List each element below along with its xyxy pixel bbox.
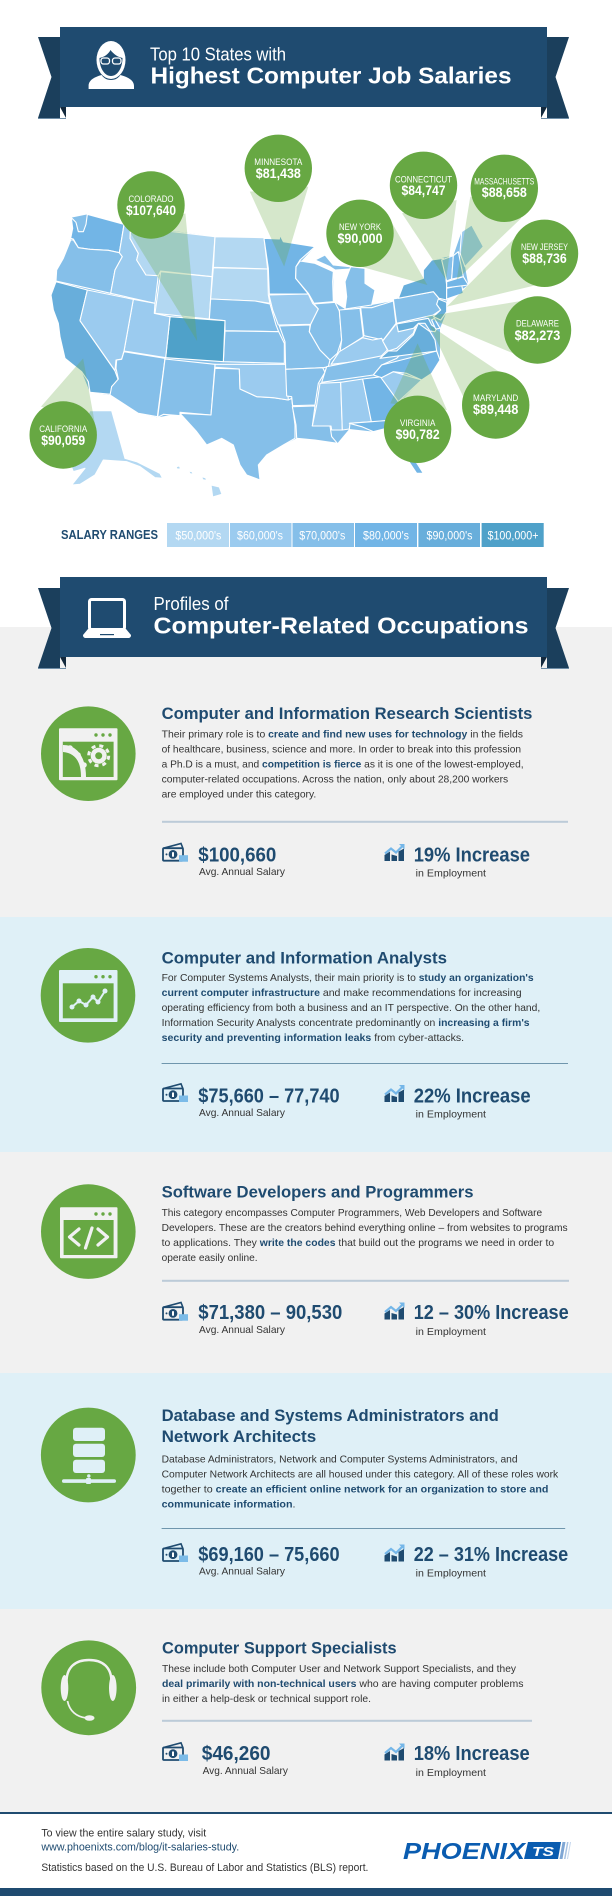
logo: Phoenix TS: [403, 1838, 571, 1864]
text: research scientists description: a Ph.D is a must, and competition is fierce as it is one of the lowest-employed,: [162, 759, 524, 771]
icon: growth chart: [384, 844, 404, 861]
logo: Phoenix TS: PHOENIX: [403, 1838, 527, 1864]
stat: employment: in Employment: [416, 1568, 486, 1580]
stat: salary: [198, 1544, 340, 1578]
map callout wedges: [41, 187, 537, 423]
stat: salary: [198, 845, 286, 878]
icon: server network: [41, 1408, 136, 1502]
stat: employment: in Employment: [416, 868, 486, 880]
heading: software developers: Software Developers and Programmers: [162, 1182, 474, 1201]
stat: salary: Avg. Annual Salary: [199, 866, 286, 878]
text: software developers description: operate easily online.: [162, 1252, 258, 1264]
background: gray panel behind profiles: [0, 627, 612, 1812]
callout: Minnesota: [245, 135, 312, 202]
callout: Virginia: VIRGINIA: [400, 418, 436, 429]
icon: person with glasses: [89, 41, 134, 89]
heading: database administrators: Network Architects: [162, 1427, 316, 1446]
callout: Colorado: [117, 171, 185, 239]
callout: New Jersey: [511, 220, 578, 287]
stat: salary: [198, 1085, 340, 1119]
legend: salary ranges: $50,000's: [175, 528, 221, 542]
text: research scientists description: are employed under this category.: [162, 789, 316, 801]
icon: money: [163, 1084, 188, 1102]
legend: salary ranges: [61, 523, 544, 547]
callout: Minnesota: MINNESOTA: [254, 157, 303, 168]
heading: database administrators: [162, 1406, 499, 1446]
stat: salary: $46,260: [202, 1743, 270, 1765]
callout: Connecticut: [390, 152, 457, 219]
callout: Delaware: $82,273: [515, 327, 561, 343]
callout: Connecticut: CONNECTICUT: [395, 174, 452, 185]
heading: research scientists: Computer and Information Research Scientists: [162, 704, 532, 723]
legend: salary ranges: $90,000's: [426, 528, 472, 542]
stat: employment: 19% Increase: [414, 845, 530, 867]
stat: salary: $100,660: [198, 845, 276, 867]
callout: Delaware: DELAWARE: [516, 319, 559, 330]
callout: Virginia: [384, 396, 451, 463]
icon: money: [163, 1544, 188, 1562]
heading: analysts: Computer and Information Analysts: [162, 948, 447, 967]
heading: top 10 states: Highest Computer Job Salaries: [150, 62, 512, 88]
map: western states: [51, 214, 483, 497]
stat: employment: 22 – 31% Increase: [414, 1544, 568, 1566]
stat: employment: 12 – 30% Increase: [414, 1302, 569, 1324]
text: study link: Statistics based on the U.S. Bureau of Labor and Statistics (BLS) report.: [41, 1862, 368, 1874]
stat: salary: $75,660 – 77,740: [198, 1085, 340, 1107]
text: analysts description: operating efficiency from both a business and an IT perspective. On the other hand,: [162, 1002, 540, 1014]
text: study link: To view the entire salary study, visit: [41, 1828, 206, 1840]
callout: California: CALIFORNIA: [39, 424, 88, 435]
legend: salary ranges: SALARY RANGES: [61, 527, 158, 542]
heading: top 10 states: Top 10 States with: [150, 44, 286, 64]
text: software developers description: to applications. They write the codes that build out the programs we need in order to: [162, 1237, 554, 1249]
heading: database administrators: Database and Systems Administrators and: [162, 1406, 499, 1425]
icon: growth chart: [384, 1744, 404, 1760]
stat: employment: [414, 1544, 568, 1580]
callout: California: [30, 401, 97, 469]
icon: line chart window: [41, 948, 135, 1043]
panel: analysts: [0, 917, 612, 1152]
callout: Massachusetts: MASSACHUSETTS: [474, 176, 534, 187]
text: support specialists description: in either a help-desk or technical support role.: [162, 1693, 371, 1705]
text: research scientists description: [162, 729, 524, 801]
text: analysts description: For Computer Systems Analysts, their main priority is to study an organization's: [162, 972, 534, 984]
callout: Virginia: $90,782: [396, 426, 440, 442]
heading: profiles: Computer-Related Occupations: [154, 612, 528, 638]
callout: Colorado: $107,640: [126, 202, 176, 218]
stat: salary: [198, 1302, 342, 1336]
icon: code window: [41, 1184, 136, 1279]
banner: top 10 states: [38, 27, 569, 119]
panel: support specialists: [41, 1638, 532, 1779]
icon: money: [163, 1743, 188, 1761]
panel: footer: [0, 1812, 612, 1896]
text: software developers description: Developers. These are the creators behind everything online – from websites to programs: [162, 1222, 568, 1234]
stat: employment: 22% Increase: [414, 1085, 531, 1107]
stat: employment: in Employment: [416, 1109, 486, 1121]
stat: salary: $69,160 – 75,660: [198, 1544, 340, 1566]
legend: salary ranges: $60,000's: [237, 528, 283, 542]
icon: headset: [41, 1640, 136, 1735]
stat: employment: [414, 1085, 531, 1121]
stat: employment: in Employment: [416, 1767, 486, 1779]
callout: New York: NEW YORK: [339, 222, 382, 233]
stat: salary: $71,380 – 90,530: [198, 1302, 342, 1324]
heading: top 10 states: [150, 44, 512, 88]
legend: salary ranges: $70,000's: [299, 528, 345, 542]
text: study link: [40, 1828, 368, 1874]
callout: Delaware: [504, 296, 571, 364]
text: analysts description: Information Security Analysts concentrate predominantly on increasing a firm's: [162, 1017, 530, 1029]
callout: Colorado: COLORADO: [128, 194, 174, 205]
callout: New York: $90,000: [338, 230, 383, 246]
text: analysts description: [162, 972, 540, 1044]
banner: profiles of computer-related occupations: [38, 577, 569, 669]
callout: Maryland: $89,448: [473, 401, 519, 417]
text: support specialists description: These include both Computer User and Network Support Specialists, and they: [162, 1663, 517, 1675]
callout: Maryland: [462, 371, 529, 439]
panel: software developers: [41, 1182, 569, 1338]
callout: New Jersey: NEW JERSEY: [521, 242, 569, 253]
text: database administrators description: Database Administrators, Network and Computer Systems Administrators, and: [162, 1454, 518, 1466]
callout: Minnesota: $81,438: [256, 165, 301, 181]
text: research scientists description: computer-related occupations. Across the nation, only about 28,200 workers: [162, 774, 508, 786]
stat: employment: [414, 1302, 569, 1338]
stat: salary: Avg. Annual Salary: [199, 1324, 286, 1336]
callout: Massachusetts: $88,658: [482, 184, 527, 200]
stat: employment: [414, 1743, 530, 1779]
text: database administrators description: Computer Network Architects are all housed under this category. All of these roles work: [162, 1469, 559, 1481]
callout: California: $90,059: [41, 432, 85, 448]
text: database administrators description: communicate information.: [162, 1499, 296, 1511]
callout: New York: [326, 200, 394, 267]
callout: Massachusetts: [471, 155, 538, 222]
text: analysts description: current computer infrastructure and make recommendations for increasing: [162, 987, 522, 999]
text: research scientists description: Their primary role is to create and find new uses for technology in the fields: [162, 729, 523, 741]
callout: New Jersey: $88,736: [522, 250, 567, 266]
heading: profiles: [154, 594, 528, 638]
text: software developers description: This category encompasses Computer Programmers, Web Developers and Software: [162, 1207, 542, 1219]
icon: money: [163, 844, 188, 862]
text: support specialists description: deal primarily with non-technical users who are having computer problems: [162, 1678, 524, 1690]
legend: salary ranges: $80,000's: [363, 528, 409, 542]
panel: database administrators: [0, 1373, 612, 1609]
heading: support specialists: Computer Support Specialists: [162, 1638, 397, 1657]
text: support specialists description: [162, 1663, 524, 1705]
text: database administrators description: [162, 1454, 559, 1511]
stat: employment: [414, 845, 530, 880]
legend: salary ranges: $100,000+: [488, 528, 538, 542]
stat: employment: in Employment: [416, 1326, 486, 1338]
text: analysts description: security and preventing information leaks from cyber-attacks.: [162, 1032, 464, 1044]
icon: growth chart: [384, 1302, 404, 1320]
logo: Phoenix TS: TS: [532, 1844, 554, 1859]
stat: employment: 18% Increase: [414, 1743, 530, 1765]
callout: Maryland: MARYLAND: [473, 393, 518, 404]
heading: profiles: Profiles of: [154, 594, 229, 614]
icon: gears window: [41, 706, 136, 801]
text: database administrators description: together to create an efficient online network for an organization to store and: [162, 1484, 548, 1496]
stat: salary: Avg. Annual Salary: [199, 1566, 286, 1578]
stat: salary: Avg. Annual Salary: [199, 1107, 286, 1119]
stat: salary: Avg. Annual Salary: [203, 1765, 289, 1777]
map: eastern states: [264, 225, 483, 473]
text: software developers description: [162, 1207, 568, 1264]
text: study link: www.phoenixts.com/blog/it-salaries-study.: [40, 1842, 239, 1854]
panel: research scientists: [41, 704, 568, 880]
icon: growth chart: [384, 1085, 404, 1102]
stat: salary: [202, 1743, 289, 1777]
callout: Connecticut: $84,747: [402, 182, 446, 198]
icon: money: [163, 1302, 188, 1321]
icon: growth chart: [384, 1544, 404, 1562]
text: research scientists description: of healthcare, business, science and more. In order to break into this profession: [162, 744, 521, 756]
icon: laptop: [83, 600, 131, 638]
